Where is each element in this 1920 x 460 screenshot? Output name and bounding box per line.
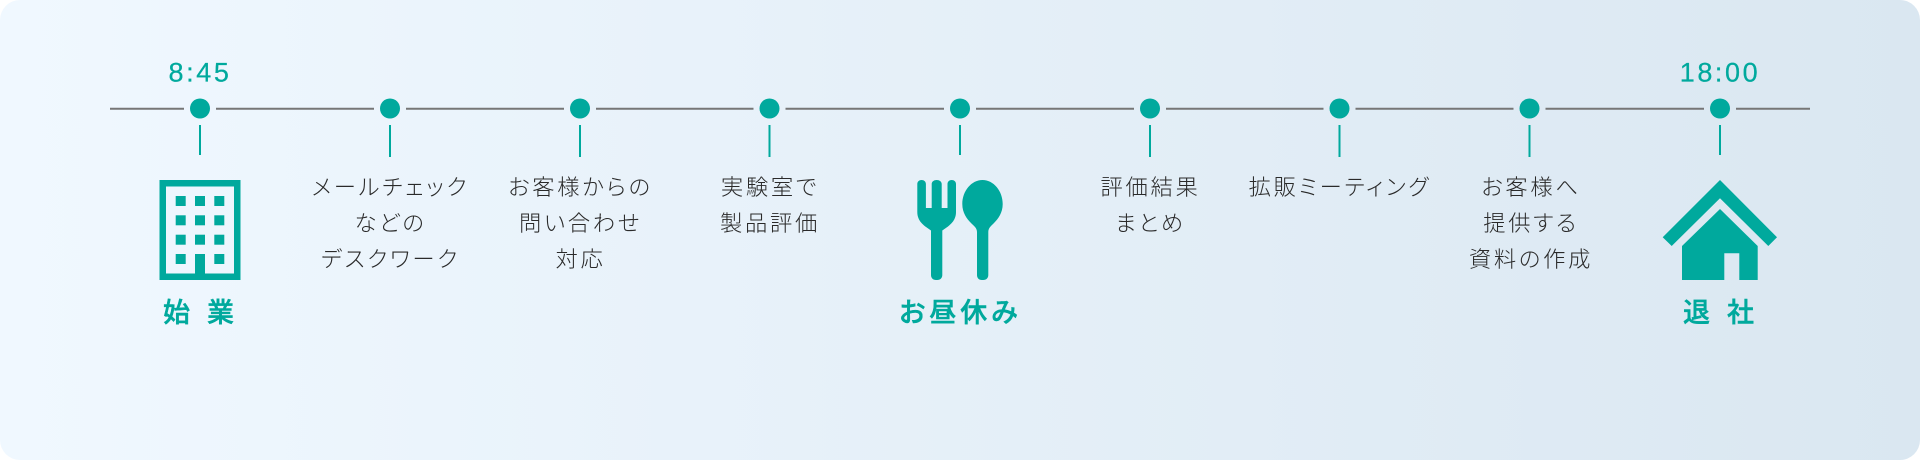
text: customer inquiries: 問い合わせ bbox=[519, 206, 642, 238]
text: email and desk work: などの bbox=[354, 206, 427, 238]
text: customer inquiries: お客様からの bbox=[508, 170, 653, 202]
text: product evaluation: 製品評価 bbox=[720, 206, 820, 238]
text: email and desk work bbox=[312, 170, 469, 274]
icon: office building bbox=[160, 180, 240, 280]
text: sales promotion meeting: 拡販ミーティング bbox=[1249, 170, 1431, 202]
start time: 8:45 bbox=[169, 58, 231, 88]
text: email and desk work: デスクワーク bbox=[321, 242, 460, 274]
timeline nodes bbox=[190, 98, 1730, 118]
label: start of work: 始 業 bbox=[163, 291, 238, 330]
text: customer materials: お客様へ bbox=[1481, 170, 1581, 202]
node connectors bbox=[200, 125, 1720, 157]
text: customer materials bbox=[1469, 170, 1593, 274]
label: leaving work: 退 社 bbox=[1683, 291, 1758, 330]
text: customer materials: 提供する bbox=[1483, 206, 1579, 238]
icon: house bbox=[1663, 180, 1777, 280]
text: product evaluation: 実験室で bbox=[721, 170, 819, 202]
end time: 18:00 bbox=[1680, 58, 1760, 88]
text: email and desk work: メールチェック bbox=[312, 170, 469, 202]
text: customer inquiries: 対応 bbox=[556, 242, 606, 274]
text: product evaluation bbox=[720, 170, 820, 238]
text: customer materials: 資料の作成 bbox=[1469, 242, 1593, 274]
text: customer inquiries bbox=[508, 170, 653, 274]
text: summarize evaluation results bbox=[1100, 170, 1200, 238]
icon: fork and spoon bbox=[917, 180, 1003, 280]
timeline axis bbox=[110, 108, 1810, 110]
text: summarize evaluation results: 評価結果 bbox=[1100, 170, 1200, 202]
label: lunch break: お昼休み bbox=[899, 291, 1022, 330]
text: summarize evaluation results: まとめ bbox=[1115, 206, 1186, 238]
